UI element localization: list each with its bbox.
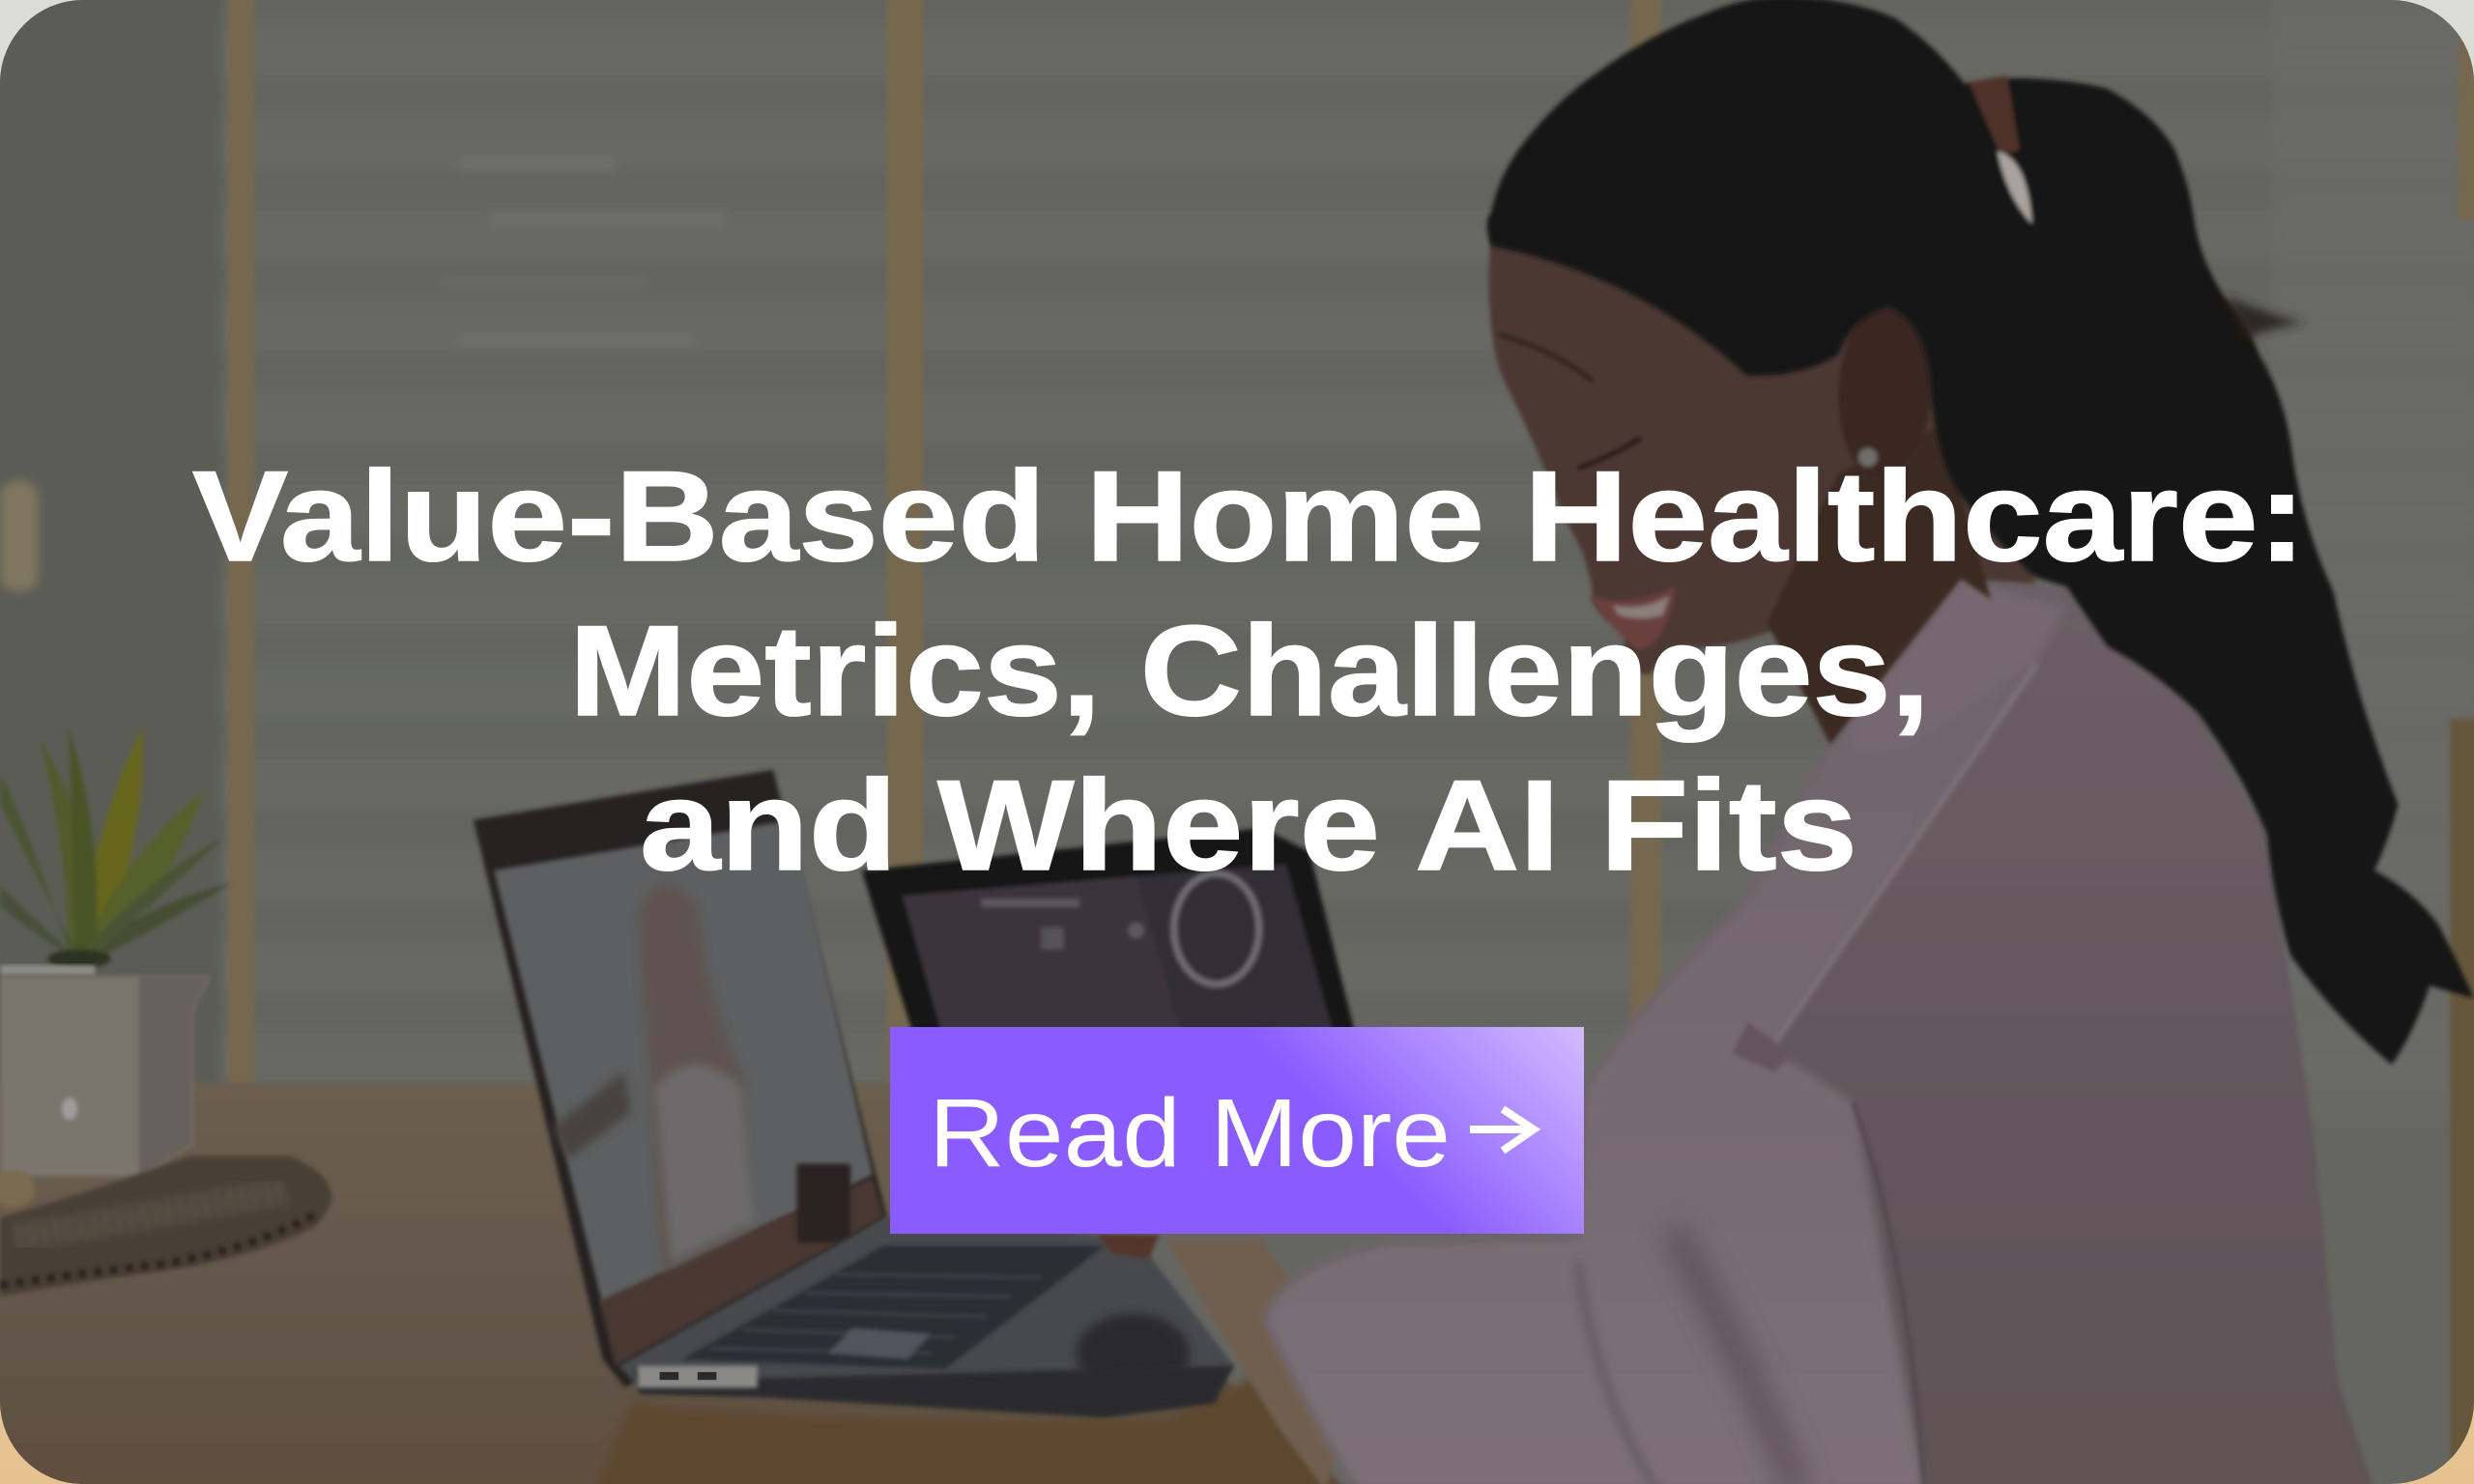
table bbox=[0, 1083, 1357, 1484]
title: Metrics, Challenges, bbox=[569, 600, 1930, 743]
tablet behind laptop bbox=[862, 828, 1357, 1041]
background: window blinds bbox=[0, 0, 2474, 1120]
title: Value-Based Home Healthcare: bbox=[192, 445, 2306, 588]
woven basket coaster bbox=[0, 1156, 331, 1297]
button label: Read More bbox=[929, 1079, 1451, 1187]
plant in pot bbox=[0, 481, 232, 1177]
woman: neck and face bbox=[1489, 189, 2035, 744]
woman: hair and ponytail bbox=[1487, 0, 2474, 1065]
woman: arm and sweater bbox=[1098, 579, 2374, 1484]
title: and Where AI Fits bbox=[640, 755, 1857, 898]
button: read more bbox=[890, 1027, 1584, 1234]
laptop with video call bbox=[474, 770, 1234, 1417]
icon: right arrow bbox=[1470, 1109, 1534, 1151]
